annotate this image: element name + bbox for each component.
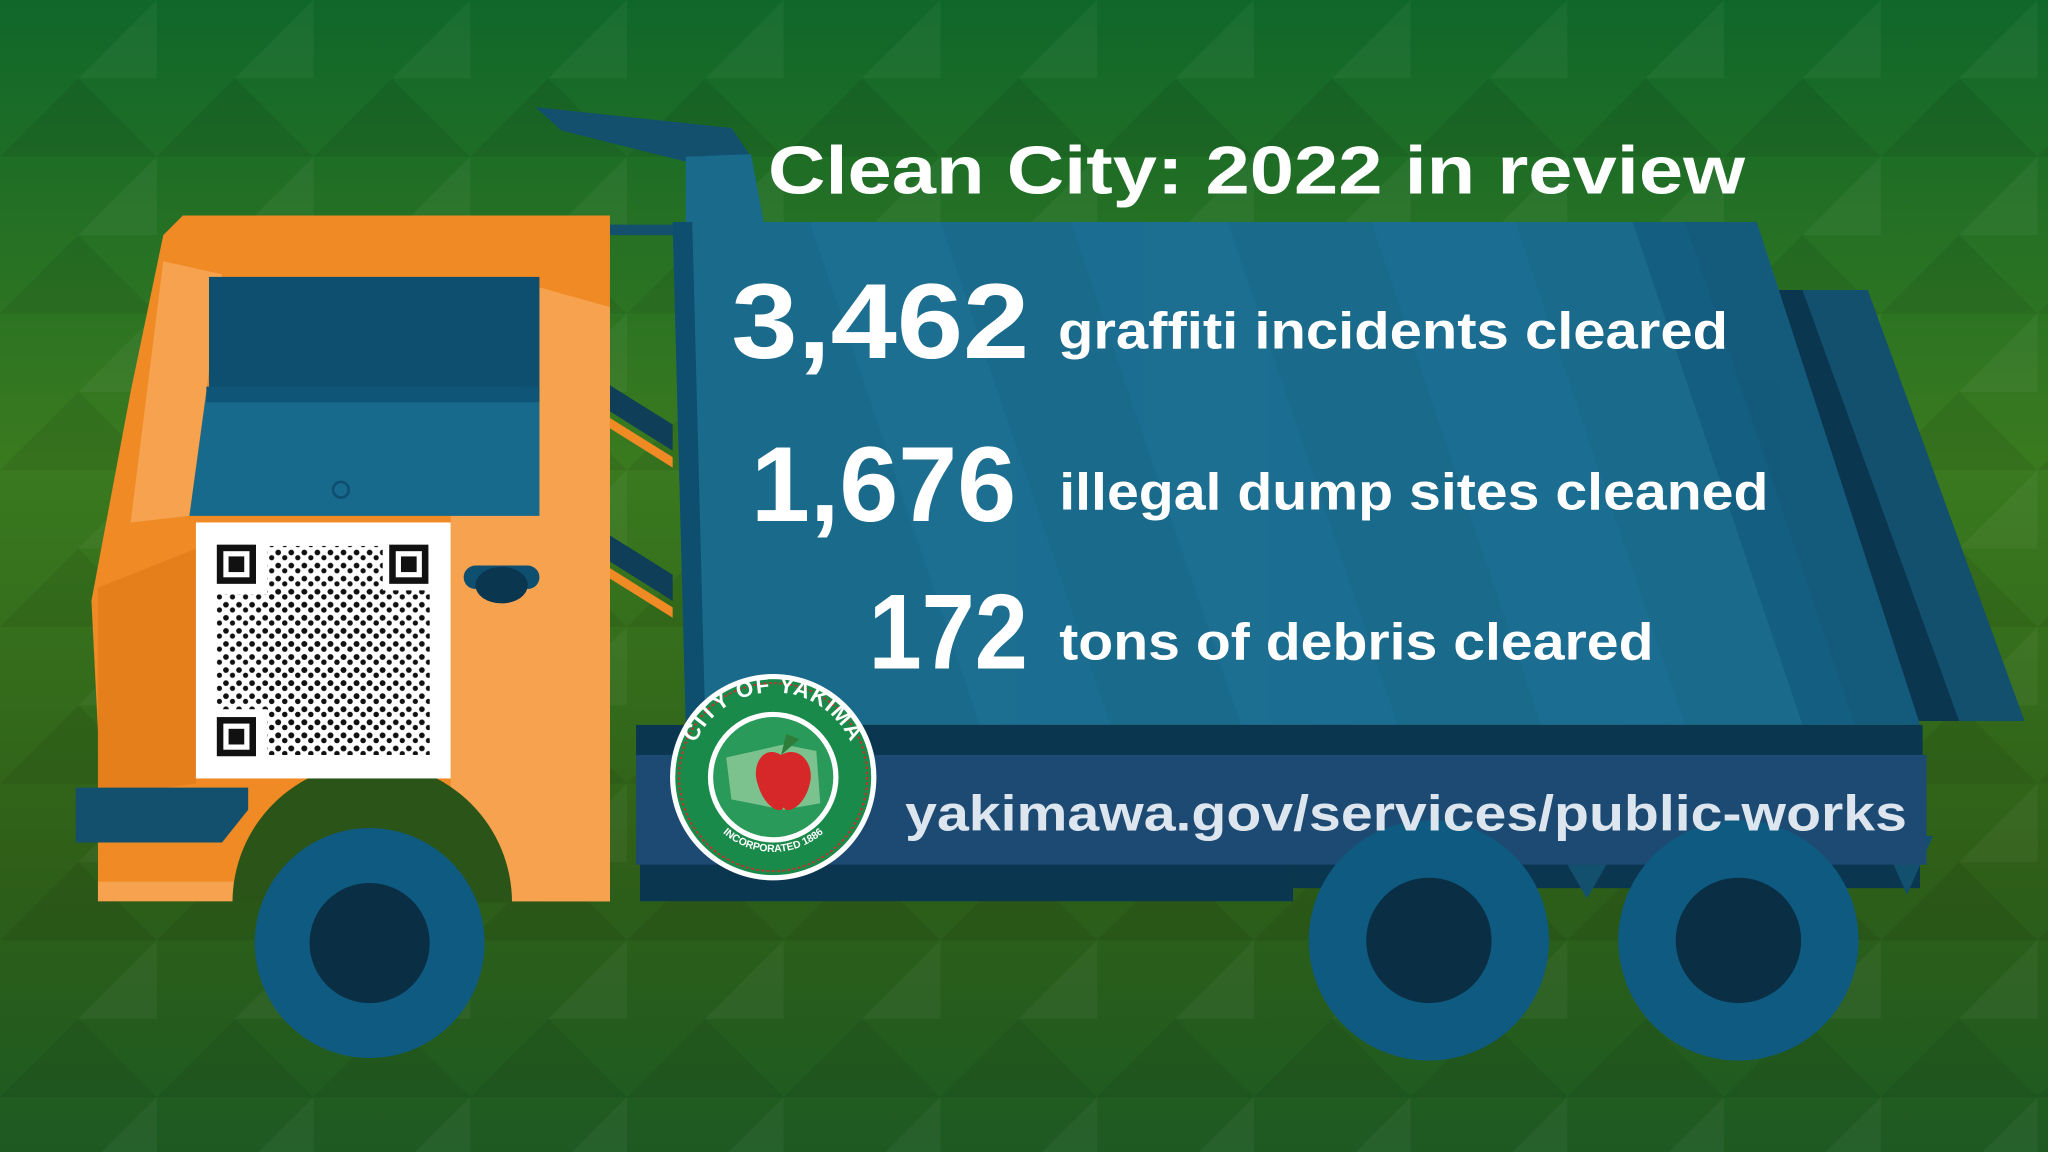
- stat: debris: tons of debris cleared: [1059, 614, 1654, 672]
- door handle: [464, 566, 539, 603]
- connector bars: [610, 225, 682, 618]
- QR code: [196, 522, 451, 778]
- stat: dump sites: [751, 424, 1768, 544]
- stat: debris: [869, 572, 1654, 692]
- stat: graffiti: 3,462: [731, 261, 1029, 381]
- stat: debris: 172: [869, 572, 1028, 692]
- url: yakimawa.gov/services/public-works: [905, 786, 1907, 842]
- stat: graffiti: graffiti incidents cleared: [1058, 303, 1728, 361]
- back panels: [1737, 290, 2024, 721]
- logo: City of Yakima seal: [670, 674, 876, 880]
- stat: graffiti: [731, 261, 1728, 381]
- logo: City of Yakima seal: CITY OF YAKIMA: [685, 679, 860, 742]
- stat: dump sites: 1,676: [751, 424, 1016, 544]
- bumper: [76, 788, 248, 842]
- exhaust stack: [536, 107, 764, 225]
- window: [189, 277, 539, 516]
- cab: [76, 216, 610, 901]
- title: Clean City: 2022 in review: [768, 133, 1745, 208]
- logo: City of Yakima seal: INCORPORATED 1886: [723, 828, 822, 852]
- wheels: [255, 828, 485, 1058]
- truck illustration: [76, 107, 2024, 1061]
- chassis: [636, 725, 1933, 901]
- wheel arch: [232, 763, 512, 903]
- bottom bar: [636, 755, 1927, 865]
- cargo body: [673, 222, 1920, 725]
- stat: dump sites: illegal dump sites cleaned: [1059, 463, 1768, 521]
